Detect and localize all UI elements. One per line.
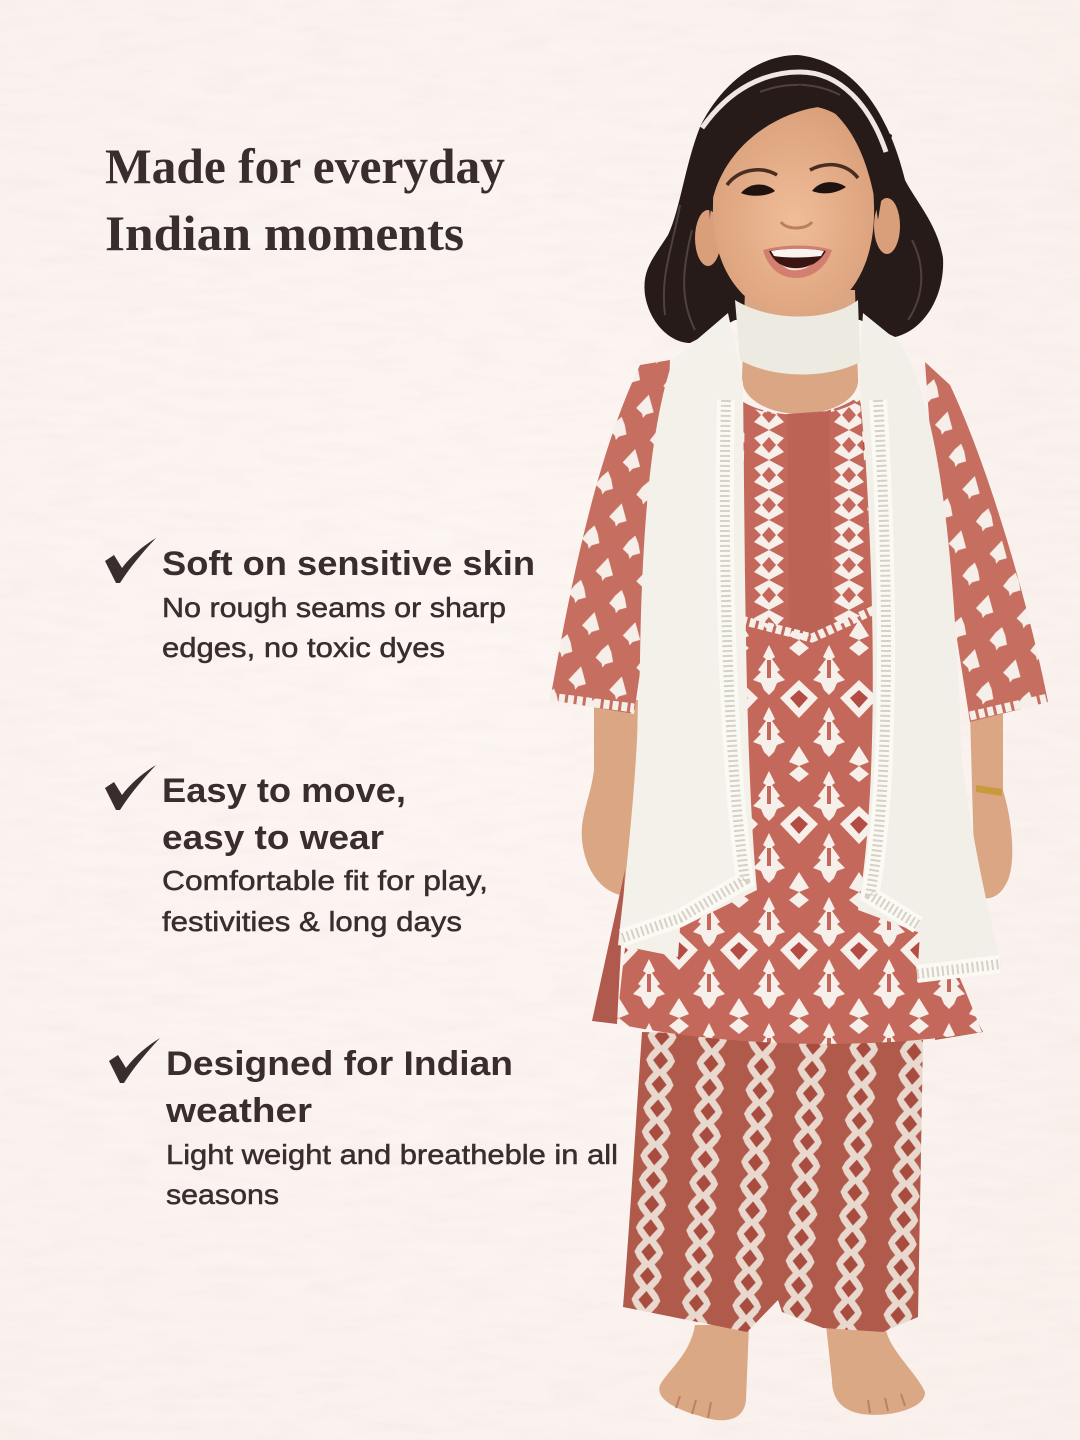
description: easy to move [162, 865, 488, 937]
arms and hands [582, 700, 1012, 898]
dupatta right panel [858, 313, 1003, 982]
description: designed for Indian weather: Light weight and breatheble in all [166, 1139, 618, 1170]
heading: designed for Indian weather: Designed for Indian [166, 1045, 513, 1083]
dupatta left panel [618, 313, 757, 957]
title: Made for everyday [105, 138, 505, 194]
kurta side panels [592, 870, 983, 1040]
heading: designed for Indian weather: weather [165, 1092, 312, 1130]
benefit: easy to move [105, 765, 488, 937]
title [105, 138, 505, 261]
description: soft on sensitive skin: edges, no toxic dyes [162, 632, 445, 663]
dupatta lace edging [622, 400, 1000, 974]
heading: easy to move, easy to wear [162, 772, 406, 857]
icon: check mark [105, 765, 156, 810]
heading: soft on sensitive skin: Soft on sensitive skin [162, 545, 535, 583]
icon: check mark [105, 538, 156, 583]
icon: check mark [109, 1038, 160, 1083]
hair highlights [664, 85, 921, 330]
smile [763, 246, 832, 278]
hair [644, 55, 943, 343]
kurta yoke [741, 400, 874, 636]
description: soft on sensitive skin [162, 592, 506, 663]
yoke centre panel [787, 411, 833, 636]
photo: smiling girl in red printed kurta set [550, 55, 1048, 1420]
description: designed for Indian weather [166, 1139, 618, 1210]
heading: designed for Indian weather [165, 1045, 513, 1130]
eyes and brows [727, 165, 858, 196]
benefit: soft on sensitive skin [105, 538, 535, 663]
pants [623, 1032, 923, 1332]
heading: easy to move, easy to wear: easy to wear [162, 819, 384, 857]
lace trim [550, 610, 1048, 716]
title: Indian moments [105, 205, 464, 261]
neck [742, 290, 858, 414]
benefit: designed for Indian weather [109, 1038, 618, 1210]
ears [695, 198, 900, 266]
description: soft on sensitive skin: No rough seams or sharp [162, 592, 506, 623]
description: designed for Indian weather: seasons [166, 1179, 279, 1210]
face [713, 105, 874, 316]
nose [781, 222, 812, 228]
dupatta neck scarf [735, 300, 860, 374]
description: easy to move: festivities & long days [162, 906, 462, 937]
gold bangle [976, 785, 1002, 796]
heading: easy to move, easy to wear: Easy to move, [162, 772, 406, 810]
kurta sleeves [550, 360, 1048, 722]
feet [659, 1325, 925, 1420]
headband [702, 72, 886, 152]
kurta body [617, 395, 982, 1044]
fringe [704, 85, 892, 220]
description: easy to move: Comfortable fit for play, [162, 865, 488, 896]
toes [676, 1394, 905, 1418]
